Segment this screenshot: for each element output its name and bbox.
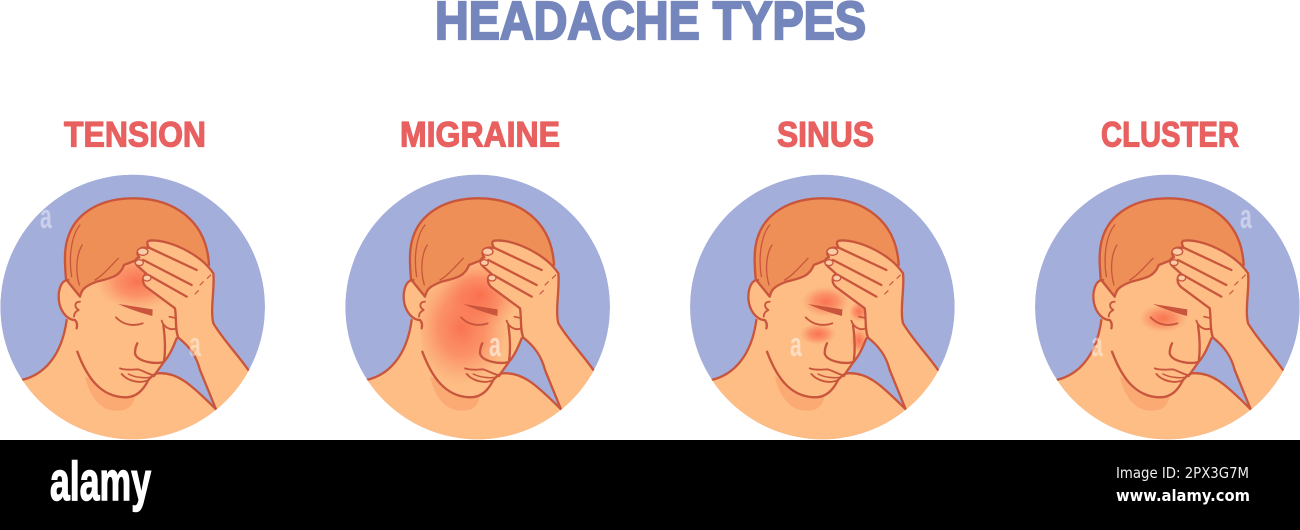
panel: migraine xyxy=(345,116,612,447)
heading: sinus: SINUS xyxy=(777,116,874,154)
illustration: cluster headache xyxy=(1035,175,1300,447)
illustration: migraine headache xyxy=(345,175,612,447)
watermark: a xyxy=(1240,197,1252,235)
watermark xyxy=(40,197,201,363)
illustration: tension headache xyxy=(0,175,267,447)
heading: cluster: CLUSTER xyxy=(1101,116,1239,154)
watermark: a xyxy=(790,325,802,363)
watermark: a xyxy=(489,325,501,363)
website: www.alamy.com xyxy=(1116,486,1250,505)
heading: tension: TENSION xyxy=(64,116,206,154)
illustration: sinus headache xyxy=(690,175,956,447)
watermark: a xyxy=(40,197,52,235)
watermark: a xyxy=(189,325,201,363)
footer logo: alamy xyxy=(50,450,151,512)
footer bar xyxy=(0,440,1300,530)
watermark: a xyxy=(1091,325,1103,363)
panel: sinus xyxy=(690,116,956,447)
panel: cluster xyxy=(1035,116,1300,447)
watermark xyxy=(1091,197,1252,363)
panel: tension xyxy=(0,116,267,447)
image id: Image ID: 2PX3G7M xyxy=(1116,464,1249,482)
heading: migraine: MIGRAINE xyxy=(400,116,560,154)
